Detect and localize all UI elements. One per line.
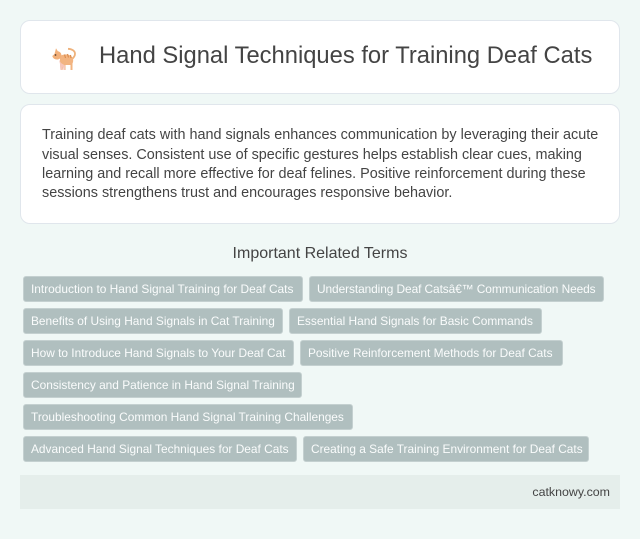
tag row 2 second: Essential Hand Signals for Basic Commands: [297, 314, 533, 328]
tag row 1: [23, 276, 303, 302]
tag row 2 second: [289, 308, 542, 334]
tag row 6: Advanced Hand Signal Techniques for Deaf Cats: [31, 442, 289, 456]
tag row 6 second: Creating a Safe Training Environment for Deaf Cats: [311, 442, 583, 456]
tag row 4: [23, 372, 302, 398]
tag row 3 second: Positive Reinforcement Methods for Deaf Cats: [308, 346, 553, 360]
tag row 2: [23, 308, 283, 334]
tag row 3: How to Introduce Hand Signals to Your Deaf Cat: [31, 346, 285, 360]
text block: description: [42, 127, 598, 201]
tag row 1: Introduction to Hand Signal Training for Deaf Cats: [31, 282, 293, 296]
text block: description: Training deaf cats with hand signals enhances communication by leveraging their acute: [42, 127, 598, 143]
tag row 3: [23, 340, 294, 366]
panel: term tags: [23, 276, 604, 462]
heading: important related terms: Important Related Terms: [233, 245, 407, 262]
tag row 2: Benefits of Using Hand Signals in Cat Training: [31, 314, 275, 328]
text block: description: visual senses. Consistent use of specific gestures helps establish clear cues, making: [42, 147, 582, 163]
tag row 6 second: [303, 436, 589, 462]
tag row 1 second: Understanding Deaf Catsâ€™ Communication Needs: [317, 282, 596, 296]
tag row 1 second: [309, 276, 604, 302]
tag row 5: [23, 404, 353, 430]
footer source text: catknowy.com: [532, 485, 610, 499]
panel: description text: [20, 104, 620, 224]
panel: title card: [20, 20, 620, 94]
text block: description: sessions strengthens trust and encourages responsive behavior.: [42, 185, 452, 201]
text block: description: learning and recall more effective for deaf felines. Positive reinforcement during these: [42, 166, 586, 182]
icon: cat: [52, 48, 76, 70]
title: Hand Signal Techniques for Training Deaf Cats: [99, 42, 592, 69]
tag row 4: Consistency and Patience in Hand Signal Training: [31, 378, 295, 392]
tag row 6: [23, 436, 297, 462]
tag row 5: Troubleshooting Common Hand Signal Training Challenges: [31, 410, 344, 424]
footer bar: [20, 475, 620, 509]
tag row 3 second: [300, 340, 563, 366]
